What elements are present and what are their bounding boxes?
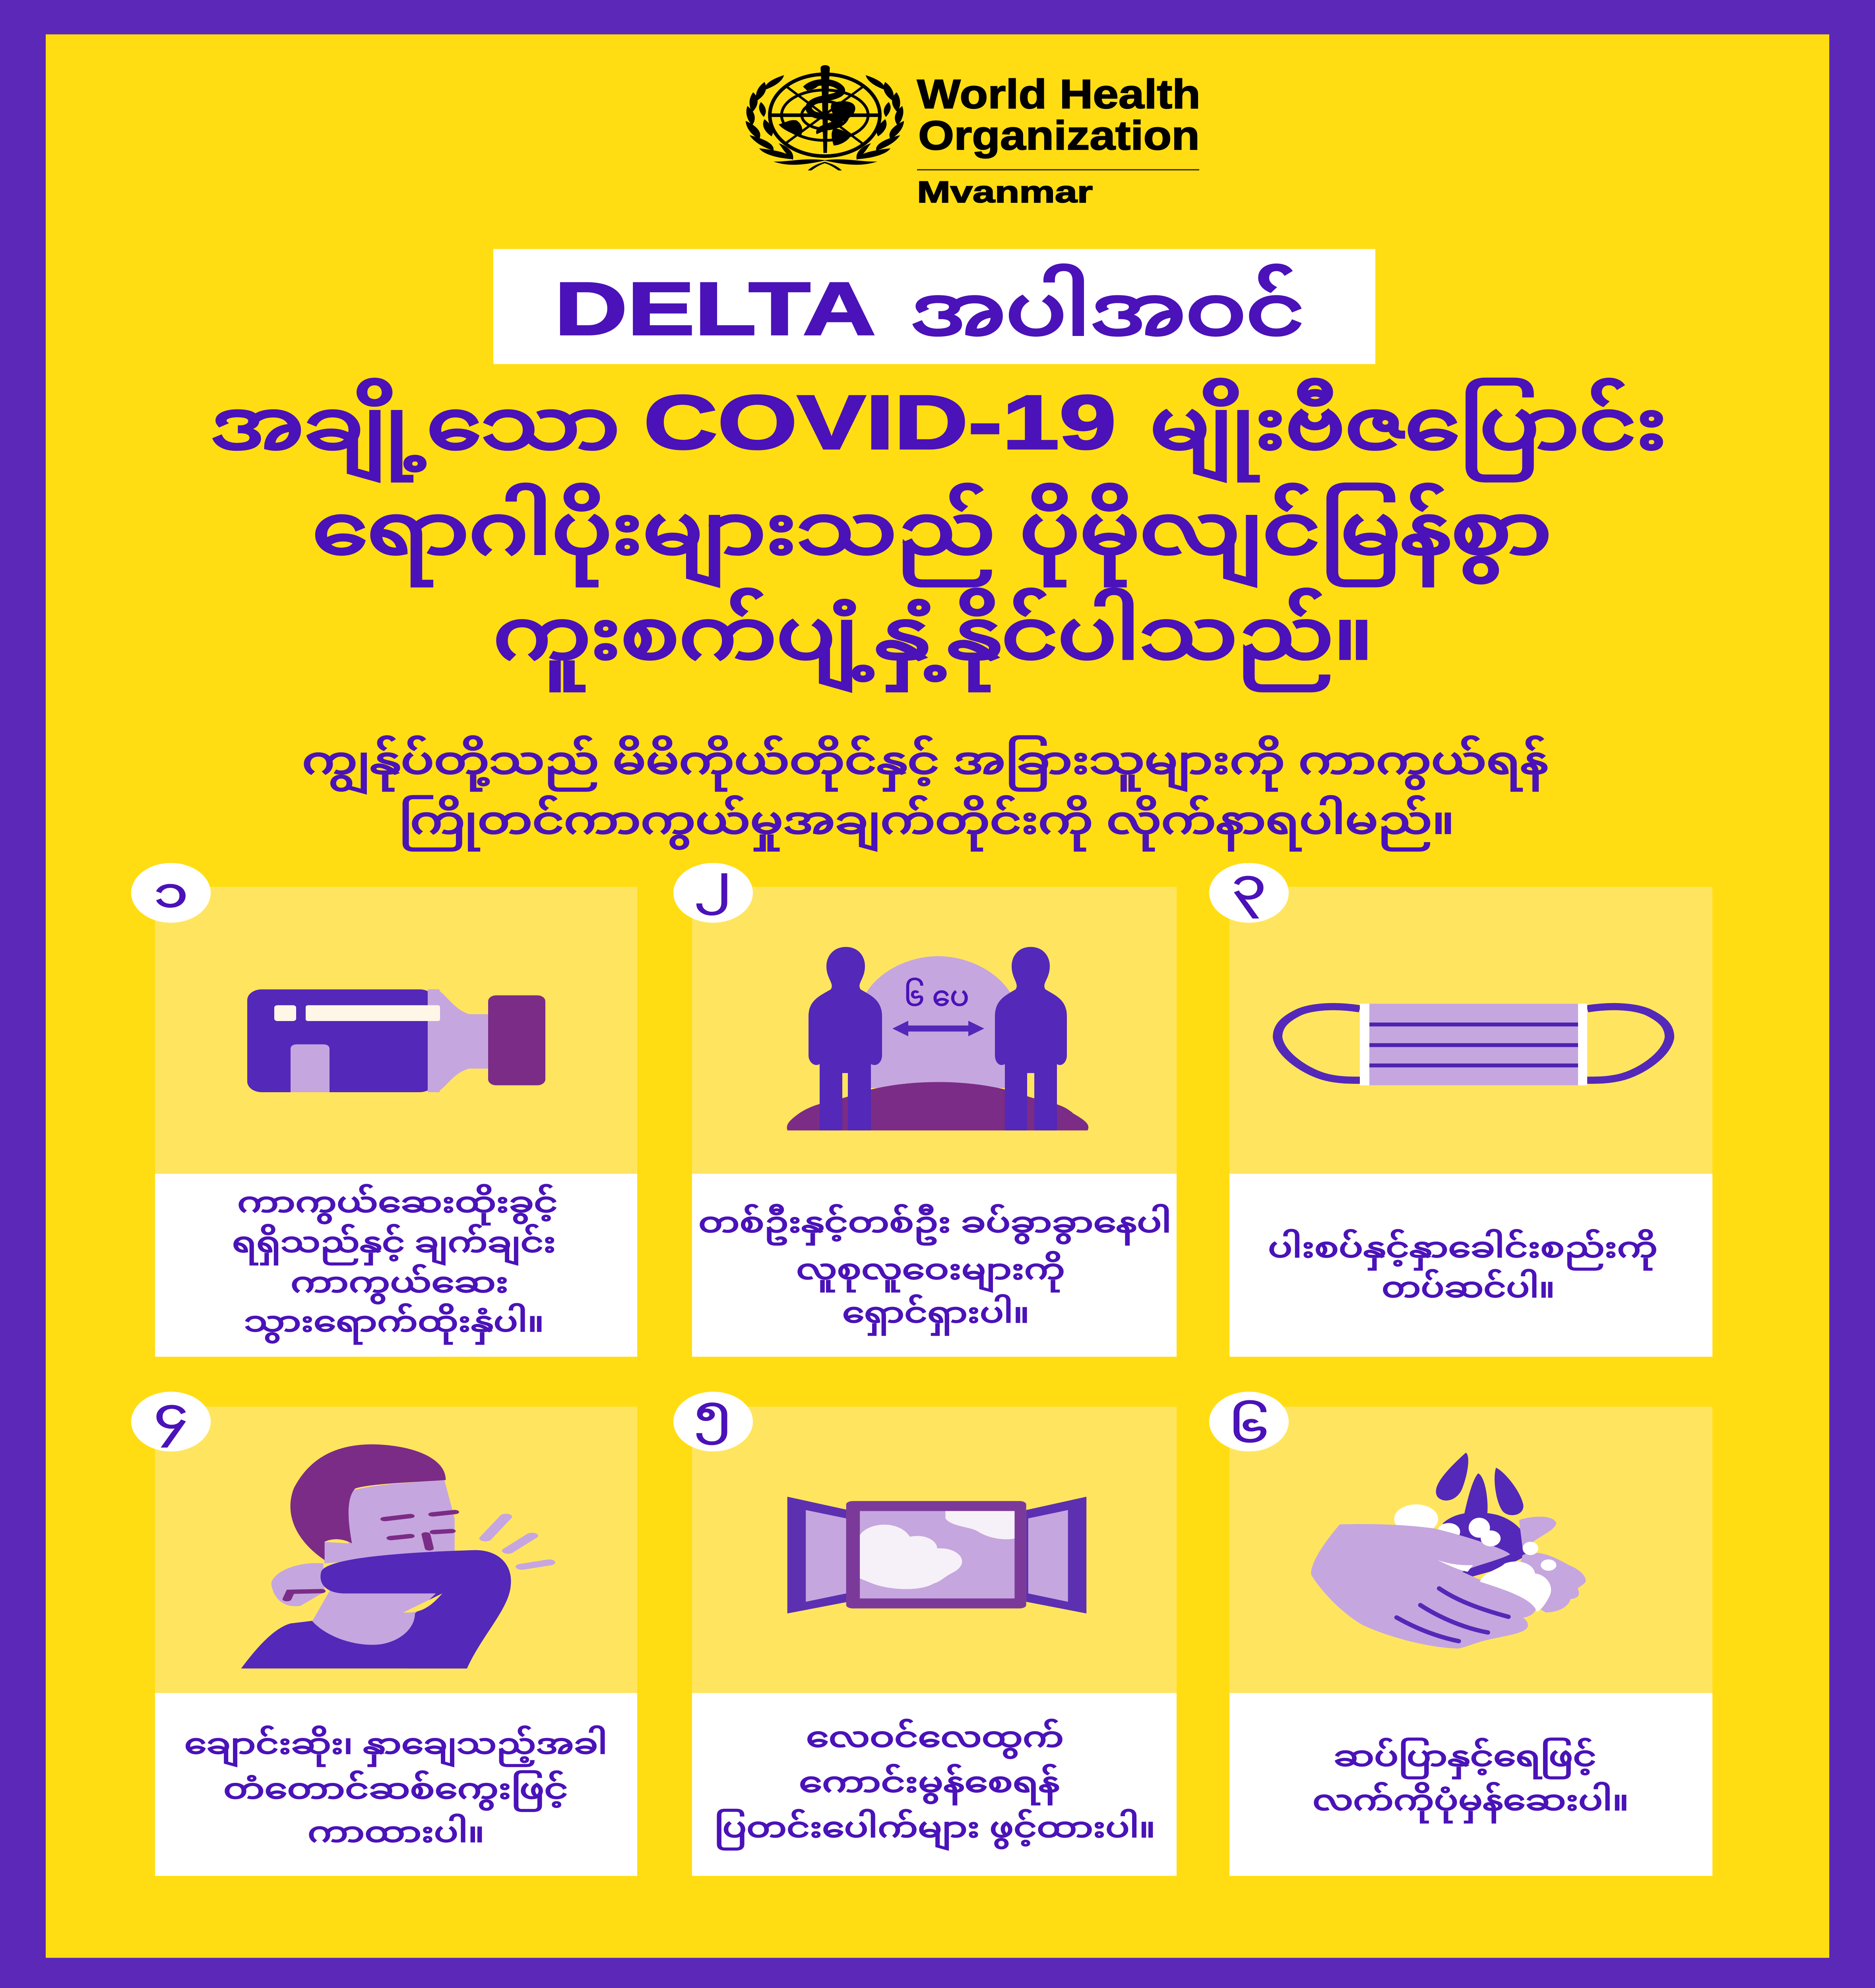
text: step 1: ကာကွယ်ဆေး [291, 1264, 508, 1304]
text: step 5 [714, 1719, 1156, 1850]
organisation name [917, 71, 1200, 209]
step number 4: ၄ [154, 1390, 188, 1447]
text: step 2: ရှောင်ရှားပါ။ [842, 1294, 1030, 1335]
text: step 2: လူစုလူဝေးများကို [796, 1251, 1065, 1292]
panel 2: distancing [673, 858, 1177, 1357]
heading box: DELTA [493, 249, 1375, 364]
icon: two people at a distance [787, 947, 1088, 1130]
icon: person coughing into elbow [241, 1444, 549, 1668]
WHO Myanmar logo [746, 65, 1200, 209]
intro text block: ကျွန်ုပ်တို့သည် မိမိကိုယ်တိုင်နှင့် အခြားသူများကို ကာကွယ်ရန် [302, 736, 1548, 794]
step number 3: ၃ [1232, 861, 1266, 918]
step number 6: ၆ [1229, 1400, 1269, 1451]
text: step 4: ချောင်းဆိုး၊ နှာချေသည့်အခါ [184, 1726, 607, 1767]
text: step 1: သွားရောက်ထိုးနှံပါ။ [244, 1303, 544, 1344]
heading box: DELTA: အပါအဝင် [910, 265, 1304, 349]
panel 3: mask [1209, 861, 1712, 1357]
panel 6: hand washing [1209, 1392, 1712, 1876]
text: step 3: တပ်ဆင်ပါ။ [1382, 1269, 1555, 1303]
step number 1 [131, 863, 211, 923]
panel 4: cough etiquette [131, 1390, 637, 1876]
text: step 1: ကာကွယ်ဆေးထိုးခွင့် [237, 1184, 558, 1225]
title: မျိုးဗီဇပြောင်း [1150, 379, 1667, 481]
text: step 6: ဆပ်ပြာနှင့်ရေဖြင့် [1334, 1738, 1596, 1779]
step number 2: ၂ [694, 858, 732, 915]
organisation name: World Health [917, 71, 1200, 117]
step number 5: ၅ [694, 1388, 732, 1445]
text: step 4 [184, 1726, 607, 1848]
organisation name: Organization [918, 112, 1200, 158]
text: step 2: တစ်ဦးနှင့်တစ်ဦး ခပ်ခွာခွာနေပါ [698, 1204, 1171, 1245]
text: step 4: တံတောင်ဆစ်ကွေးဖြင့် [223, 1771, 568, 1811]
title: ရောဂါပိုးများသည် ပိုမိုလျင်မြန်စွာ [312, 484, 1551, 586]
text: step 5: ပြတင်းပေါက်များ ဖွင့်ထားပါ။ [714, 1809, 1156, 1850]
title: အချို့သော [210, 379, 620, 481]
step number 1: ၁ [154, 870, 188, 916]
panel 5: ventilation [673, 1388, 1177, 1876]
text: step 5: လေဝင်လေထွက် [806, 1719, 1064, 1759]
organisation name: Mvanmar [917, 175, 1093, 209]
step number 5 [673, 1388, 753, 1452]
heading box: DELTA: DELTA [555, 267, 876, 350]
text: step 3: ပါးစပ်နှင့်နှာခေါင်းစည်းကို [1268, 1229, 1658, 1270]
icon: two people at a distance: ၆ ပေ [904, 978, 969, 1012]
text: step 6 [1313, 1738, 1629, 1823]
step number 3 [1209, 861, 1289, 923]
text: step 2 [698, 1204, 1171, 1335]
title: COVID-19 [644, 379, 1116, 465]
text: step 4: ကာထားပါ။ [308, 1814, 485, 1848]
text: step 1: ရရှိသည်နှင့် ချက်ချင်း [232, 1224, 556, 1265]
intro text block: ကြိုတင်ကာကွယ်မှုအချက်တိုင်းကို လိုက်နာရပါမည်။ [399, 796, 1454, 851]
icon: vaccine vial [247, 989, 545, 1092]
icon: washing hands with soap [1311, 1453, 1586, 1648]
step number 4 [131, 1390, 211, 1452]
text: step 3 [1268, 1229, 1658, 1303]
step number 6 [1209, 1392, 1289, 1452]
icon: WHO emblem [746, 65, 904, 171]
text: step 5: ကောင်းမွန်စေရန် [799, 1764, 1060, 1805]
intro text block [302, 736, 1548, 851]
title [210, 379, 1667, 691]
icon: open window [787, 1497, 1086, 1613]
text: step 1 [232, 1184, 558, 1344]
step number 2 [673, 858, 753, 923]
panel 1: vaccination [131, 863, 637, 1357]
title: ကူးစက်ပျံ့နှံ့နိုင်ပါသည်။ [493, 589, 1373, 691]
text: step 6: လက်ကိုပုံမှန်ဆေးပါ။ [1313, 1782, 1629, 1823]
icon: face mask [1278, 1004, 1669, 1085]
